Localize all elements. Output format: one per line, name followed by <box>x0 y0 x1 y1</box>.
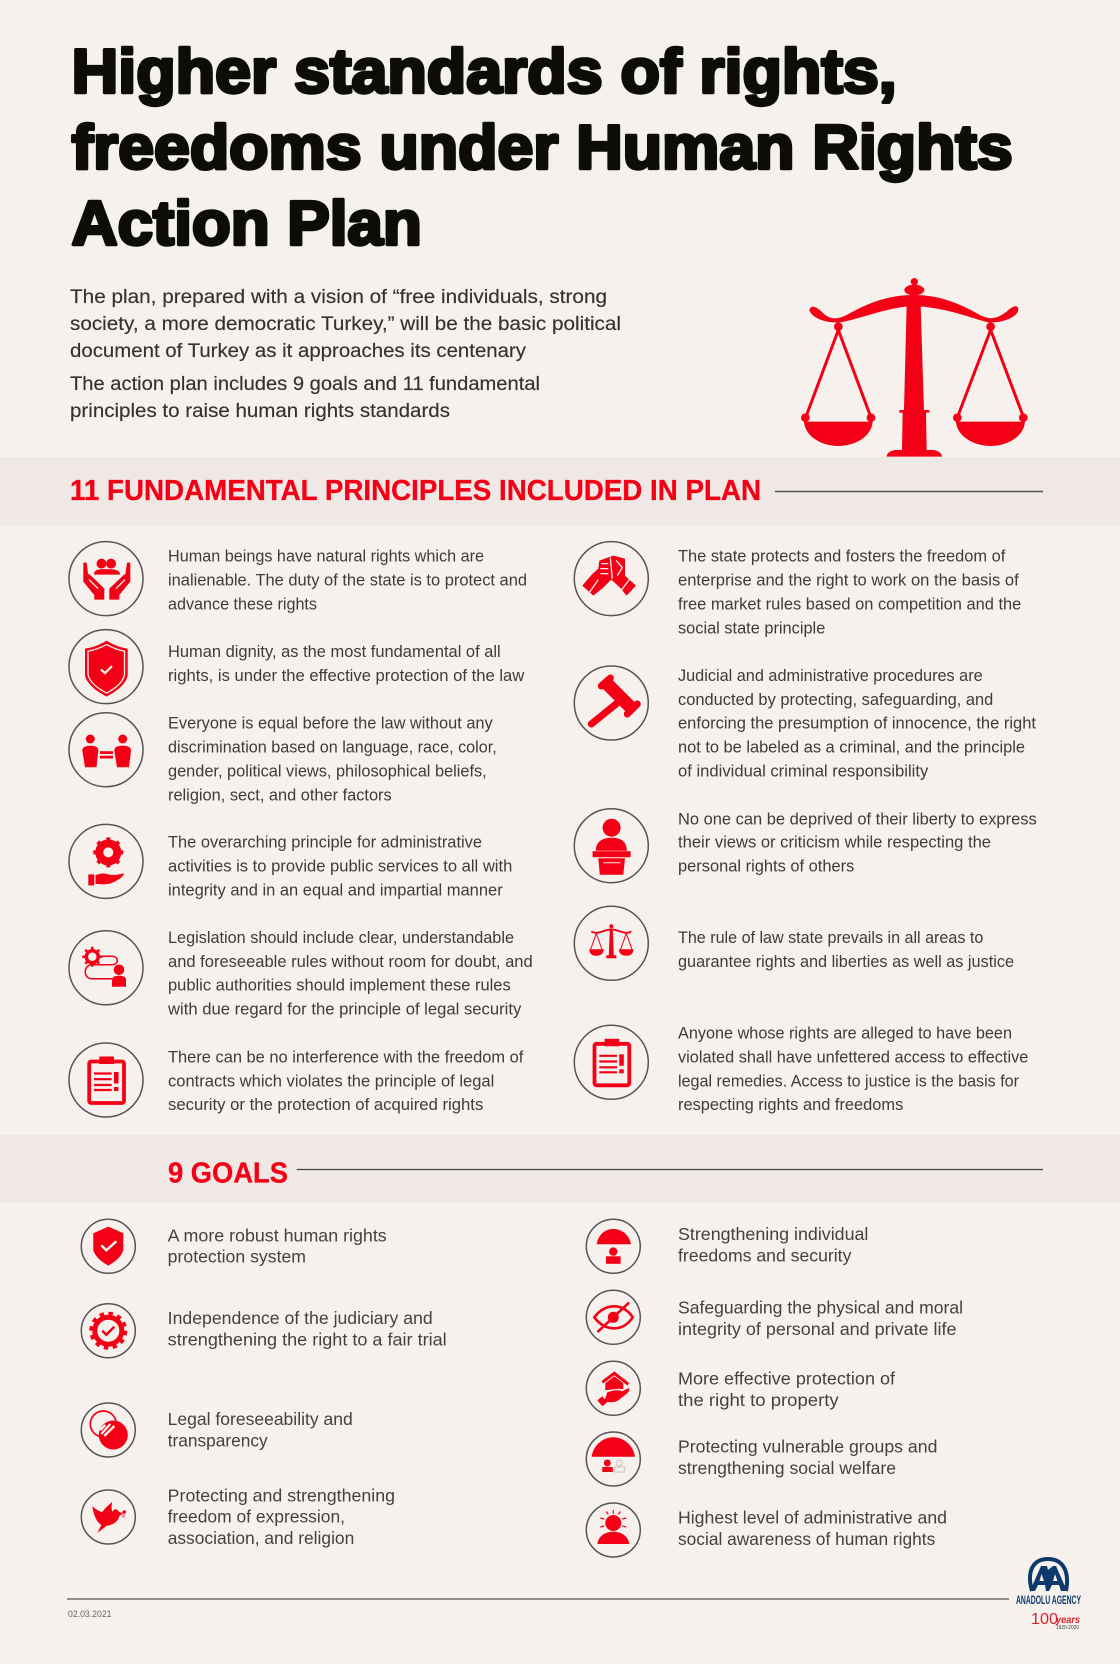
principle 5: public authorities should implement these rules <box>168 977 511 995</box>
principle 10 <box>574 906 1014 980</box>
title <box>72 38 1013 258</box>
goal 7 <box>586 1361 895 1415</box>
principle 8: not to be labeled as a criminal, and the principle <box>678 739 1025 757</box>
principle 5: and foreseeable rules without room for doubt, and <box>168 953 533 971</box>
principle 8: conducted by protecting, safeguarding, and <box>678 691 993 709</box>
principle 5: with due regard for the principle of legal security <box>167 1001 522 1019</box>
principle 6 <box>69 1043 524 1117</box>
principle 9: No one can be deprived of their liberty to express <box>678 810 1037 828</box>
goal 5: Strengthening individual <box>678 1224 868 1244</box>
title: freedoms under Human Rights <box>72 114 1013 182</box>
principle 9: their views or criticism while respecting the <box>678 834 991 852</box>
principle 2: rights, is under the effective protection of the law <box>168 667 525 685</box>
principle 7 <box>574 542 1021 637</box>
principle 3: discrimination based on language, race, color, <box>168 738 497 756</box>
principle 2 <box>69 630 525 704</box>
band: 11 fundamental principles <box>0 457 1120 526</box>
principle 7: enterprise and the right to work on the basis of <box>678 572 1019 590</box>
principle 6: contracts which violates the principle of legal <box>168 1072 494 1090</box>
band: 11 fundamental principles: 11 FUNDAMENTAL PRINCIPLES INCLUDED IN PLAN <box>70 475 761 507</box>
goal 3: Legal foreseeability and <box>168 1409 353 1429</box>
goal 9: social awareness of human rights <box>678 1529 936 1549</box>
goal 1: protection system <box>168 1247 306 1267</box>
principle 2: Human dignity, as the most fundamental of all <box>168 643 501 661</box>
title: Higher standards of rights, <box>72 38 897 106</box>
date: 02.03.2021 <box>68 1609 112 1619</box>
principle 10: The rule of law state prevails in all areas to <box>678 929 983 947</box>
goal 6: integrity of personal and private life <box>678 1319 956 1339</box>
principle 1: advance these rights <box>168 596 317 614</box>
principle 11: respecting rights and freedoms <box>678 1096 903 1114</box>
principle 9 <box>574 809 1037 883</box>
principle 4: The overarching principle for administrative <box>168 834 482 852</box>
intro text: The action plan includes 9 goals and 11 fundamental <box>70 374 540 395</box>
goal 8: strengthening social welfare <box>678 1458 896 1478</box>
footer rule <box>67 1598 1009 1600</box>
principle 4: activities is to provide public services to all with <box>168 858 512 876</box>
principle 3: Everyone is equal before the law without any <box>168 714 494 732</box>
goal 4 <box>81 1485 395 1548</box>
principle 7: social state principle <box>678 619 825 637</box>
principle 4 <box>69 824 512 900</box>
principle 3 <box>69 713 497 804</box>
principle 5: Legislation should include clear, understandable <box>168 929 514 947</box>
goal 6: Safeguarding the physical and moral <box>678 1298 963 1318</box>
logo: Anadolu Agency: years <box>1055 1615 1080 1626</box>
goal 5 <box>586 1219 868 1273</box>
principle 3: religion, sect, and other factors <box>168 786 392 804</box>
goal 4: freedom of expression, <box>168 1507 345 1527</box>
intro text: society, a more democratic Turkey,” will be the basic political <box>70 314 621 335</box>
goal 2 <box>81 1304 447 1358</box>
goal 3 <box>81 1403 353 1457</box>
principle 11: legal remedies. Access to justice is the basis for <box>678 1072 1020 1090</box>
logo: Anadolu Agency <box>1016 1559 1081 1631</box>
goal 7: More effective protection of <box>678 1369 895 1389</box>
goal 7: the right to property <box>678 1390 839 1410</box>
principle 7: The state protects and fosters the freedom of <box>678 548 1006 566</box>
principle 8 <box>574 666 1036 780</box>
principle 1: inalienable. The duty of the state is to protect and <box>168 572 527 590</box>
logo: Anadolu Agency: 100 <box>1031 1611 1058 1628</box>
goal 6 <box>586 1290 963 1344</box>
intro text: document of Turkey as it approaches its centenary <box>70 341 527 362</box>
goal 2: strengthening the right to a fair trial <box>168 1329 447 1349</box>
principle 9: personal rights of others <box>678 858 854 876</box>
intro text <box>70 287 621 422</box>
goal 9 <box>586 1503 947 1557</box>
principle 6: security or the protection of acquired rights <box>168 1096 483 1114</box>
principle 8: enforcing the presumption of innocence, the right <box>678 715 1036 733</box>
goal 8: Protecting vulnerable groups and <box>678 1437 937 1457</box>
principle 4: integrity and in an equal and impartial manner <box>168 882 503 900</box>
principle 11 <box>574 1024 1028 1114</box>
goal 9: Highest level of administrative and <box>678 1508 947 1528</box>
goal 4: Protecting and strengthening <box>168 1485 395 1505</box>
intro text: principles to raise human rights standards <box>70 401 450 422</box>
goal 4: association, and religion <box>168 1528 354 1548</box>
principle 6: There can be no interference with the freedom of <box>168 1048 524 1066</box>
principle 8: Judicial and administrative procedures are <box>678 667 983 685</box>
principle 1: Human beings have natural rights which are <box>168 548 484 566</box>
logo: Anadolu Agency: 1920-2020 <box>1056 1625 1079 1631</box>
principle 8: of individual criminal responsibility <box>678 762 929 780</box>
goal 1: A more robust human rights <box>168 1225 387 1245</box>
principle 7: free market rules based on competition and the <box>678 596 1021 614</box>
intro text: The plan, prepared with a vision of “free individuals, strong <box>70 287 607 308</box>
goal 3: transparency <box>168 1430 268 1450</box>
principle 1 <box>69 542 527 616</box>
principle 11: Anyone whose rights are alleged to have been <box>678 1024 1012 1042</box>
icon: large scales of justice <box>801 278 1028 457</box>
band: 9 goals: 9 GOALS <box>168 1158 288 1190</box>
goal 1 <box>81 1219 387 1273</box>
principle 5 <box>69 929 533 1019</box>
goal 8 <box>586 1432 937 1486</box>
band: 9 goals <box>0 1135 1120 1203</box>
principle 3: gender, political views, philosophical beliefs, <box>168 762 487 780</box>
title: Action Plan <box>72 190 422 258</box>
goal 2: Independence of the judiciary and <box>168 1308 433 1328</box>
goal 5: freedoms and security <box>678 1246 852 1266</box>
principle 10: guarantee rights and liberties as well as justice <box>678 953 1014 971</box>
principle 11: violated shall have unfettered access to effective <box>678 1048 1028 1066</box>
